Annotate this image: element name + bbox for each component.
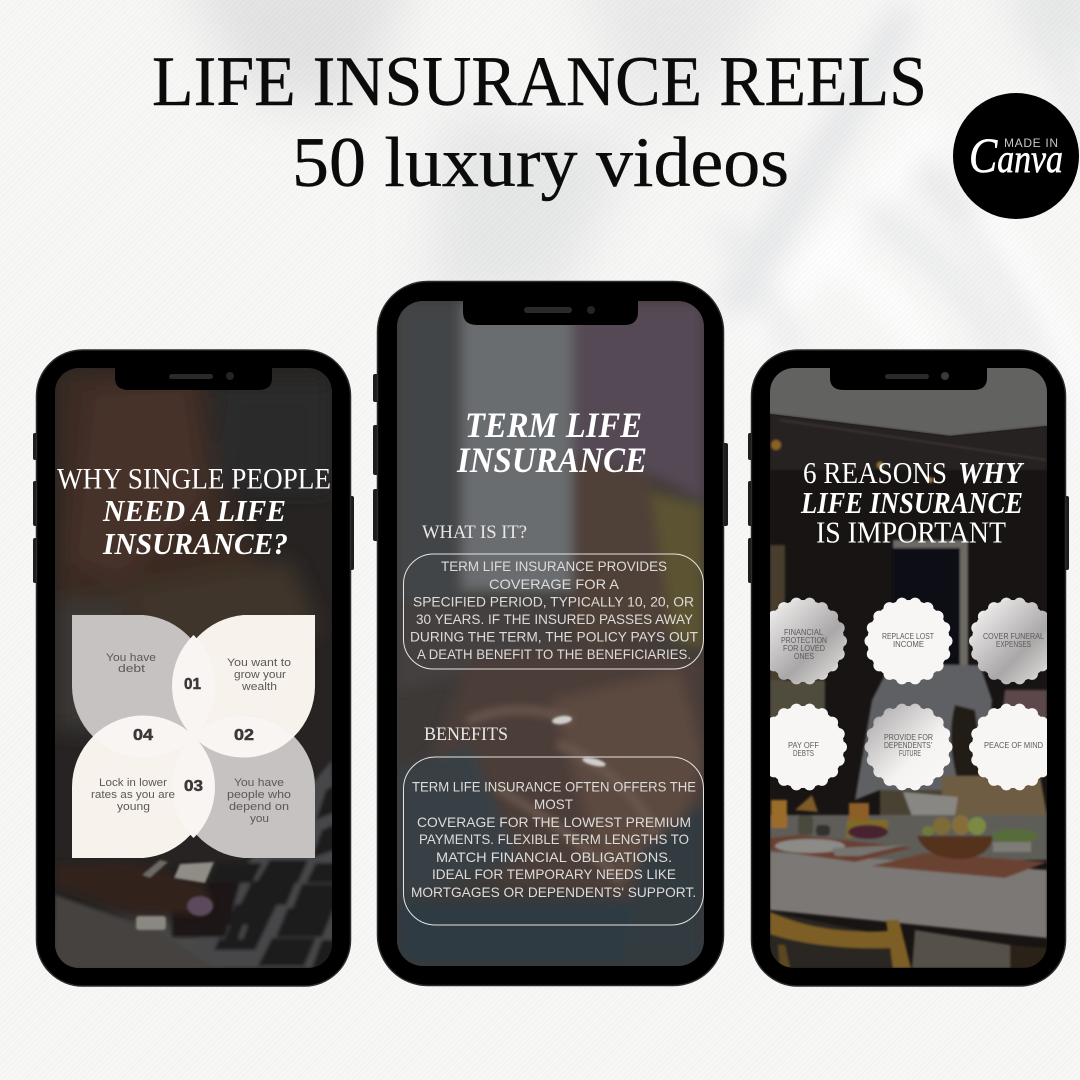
- title: 50 luxury videos: [292, 124, 789, 202]
- petal diagram: depend on: [229, 801, 289, 813]
- heading: [456, 405, 647, 480]
- petal diagram: rates as you are: [91, 789, 175, 801]
- section: benefits: IDEAL FOR TEMPORARY NEEDS LIKE: [432, 866, 676, 882]
- heading: [57, 462, 331, 561]
- section: benefits: BENEFITS: [424, 724, 508, 745]
- petal diagram: You want to: [227, 657, 291, 669]
- phone 1 photo: hands on laptop: [55, 368, 340, 970]
- badge: made in canva: Canva: [969, 127, 1063, 183]
- badge: pay off debts: DEBTS: [793, 749, 814, 758]
- heading: INSURANCE?: [102, 526, 288, 561]
- heading: TERM LIFE: [465, 405, 642, 445]
- heading: 6 REASONS: [803, 455, 947, 490]
- badge: peace of mind: [972, 706, 1054, 788]
- petal diagram: wealth: [241, 681, 277, 693]
- section: benefits: MOST: [534, 796, 573, 812]
- phone 3 frame: [748, 350, 1069, 986]
- section: what is it: SPECIFIED PERIOD, TYPICALLY 10, 20, OR: [413, 594, 694, 610]
- badge: financial protection: FINANCIAL: [784, 628, 824, 637]
- badge: cover funeral expenses: COVER FUNERAL: [983, 632, 1044, 641]
- petal diagram: [72, 614, 315, 858]
- phone 3: 6 reasons: [748, 350, 1069, 986]
- badge: pay off debts: [762, 706, 844, 788]
- badge: financial protection: ONES: [794, 652, 814, 661]
- phone 2 frame: [373, 282, 728, 986]
- section: benefits: MORTGAGES OR DEPENDENTS' SUPPORT.: [411, 884, 696, 900]
- heading: INSURANCE: [456, 440, 647, 480]
- badge: financial protection: FOR LOVED: [783, 644, 825, 653]
- title: LIFE INSURANCE REELS: [152, 43, 927, 121]
- section: benefits: MATCH FINANCIAL OBLIGATIONS.: [436, 849, 672, 865]
- badge: provide for dependents: PROVIDE FOR: [884, 733, 933, 742]
- badge: provide for dependents: [868, 706, 950, 788]
- badge: replace lost income: REPLACE LOST: [882, 632, 934, 641]
- badge: made in canva: [953, 93, 1079, 219]
- petal diagram: 02: [234, 727, 254, 744]
- badge: provide for dependents: FUTURE: [899, 749, 921, 758]
- badge: pay off debts: PAY OFF: [788, 741, 819, 750]
- badge: financial protection: PROTECTION: [781, 636, 827, 645]
- section: benefits: COVERAGE FOR THE LOWEST PREMIUM: [417, 814, 691, 830]
- heading: WHY: [958, 455, 1025, 490]
- petal diagram: You have: [106, 652, 156, 664]
- phone 1 notch: [115, 366, 272, 390]
- scalloped reason badges: [762, 600, 1054, 788]
- badge: provide for dependents: DEPENDENTS': [884, 741, 932, 750]
- section: what is it: [404, 522, 704, 669]
- badge: peace of mind: PEACE OF MIND: [984, 741, 1043, 750]
- petal diagram: Lock in lower: [99, 777, 167, 789]
- badge: made in canva: MADE IN: [1004, 136, 1058, 150]
- badge: replace lost income: [868, 600, 950, 682]
- petal diagram: 03: [184, 778, 203, 795]
- section: what is it: A DEATH BENEFIT TO THE BENEFICIARIES.: [417, 646, 691, 662]
- section: what is it: DURING THE TERM, THE POLICY PAYS OUT: [410, 628, 698, 644]
- badge: cover funeral expenses: [972, 600, 1054, 682]
- heading: LIFE INSURANCE: [800, 485, 1023, 520]
- section: benefits: [404, 724, 704, 925]
- petal diagram: people who: [227, 789, 291, 801]
- badge: financial protection: [762, 600, 844, 682]
- phone 3 notch: [830, 366, 987, 390]
- phone 3 photo: family at dinner table: [770, 368, 1047, 968]
- petal diagram: You have: [234, 777, 284, 789]
- petal diagram: 01: [184, 676, 201, 693]
- phone 2: term life insurance: [373, 282, 728, 986]
- section: benefits: PAYMENTS. FLEXIBLE TERM LENGTHS TO: [419, 831, 689, 847]
- title: [152, 43, 927, 202]
- section: what is it: TERM LIFE INSURANCE PROVIDES: [441, 558, 667, 574]
- phone 2 photo: stacked hands: [397, 301, 704, 966]
- laptop keyboard: [55, 760, 340, 968]
- heading: [800, 455, 1025, 550]
- badge: cover funeral expenses: EXPENSES: [996, 640, 1031, 649]
- heading: WHY SINGLE PEOPLE: [57, 462, 331, 496]
- petal diagram: 04: [133, 727, 153, 744]
- section: benefits: TERM LIFE INSURANCE OFTEN OFFERS THE: [412, 778, 696, 794]
- section: what is it: WHAT IS IT?: [422, 522, 527, 543]
- petal diagram: young: [117, 801, 150, 813]
- petal diagram: debt: [118, 663, 145, 675]
- section: what is it: COVERAGE FOR A: [489, 576, 620, 592]
- badge: replace lost income: INCOME: [893, 640, 924, 649]
- heading: NEED A LIFE: [102, 493, 286, 528]
- section: what is it: 30 YEARS. IF THE INSURED PASSES AWAY: [416, 611, 694, 627]
- phone 1: why single people: [33, 350, 354, 986]
- petal diagram: grow your: [234, 669, 286, 681]
- heading: IS IMPORTANT: [816, 514, 1006, 550]
- petal diagram: you: [250, 813, 269, 825]
- phone 1 frame: [33, 350, 354, 986]
- phone 2 notch: [463, 299, 638, 325]
